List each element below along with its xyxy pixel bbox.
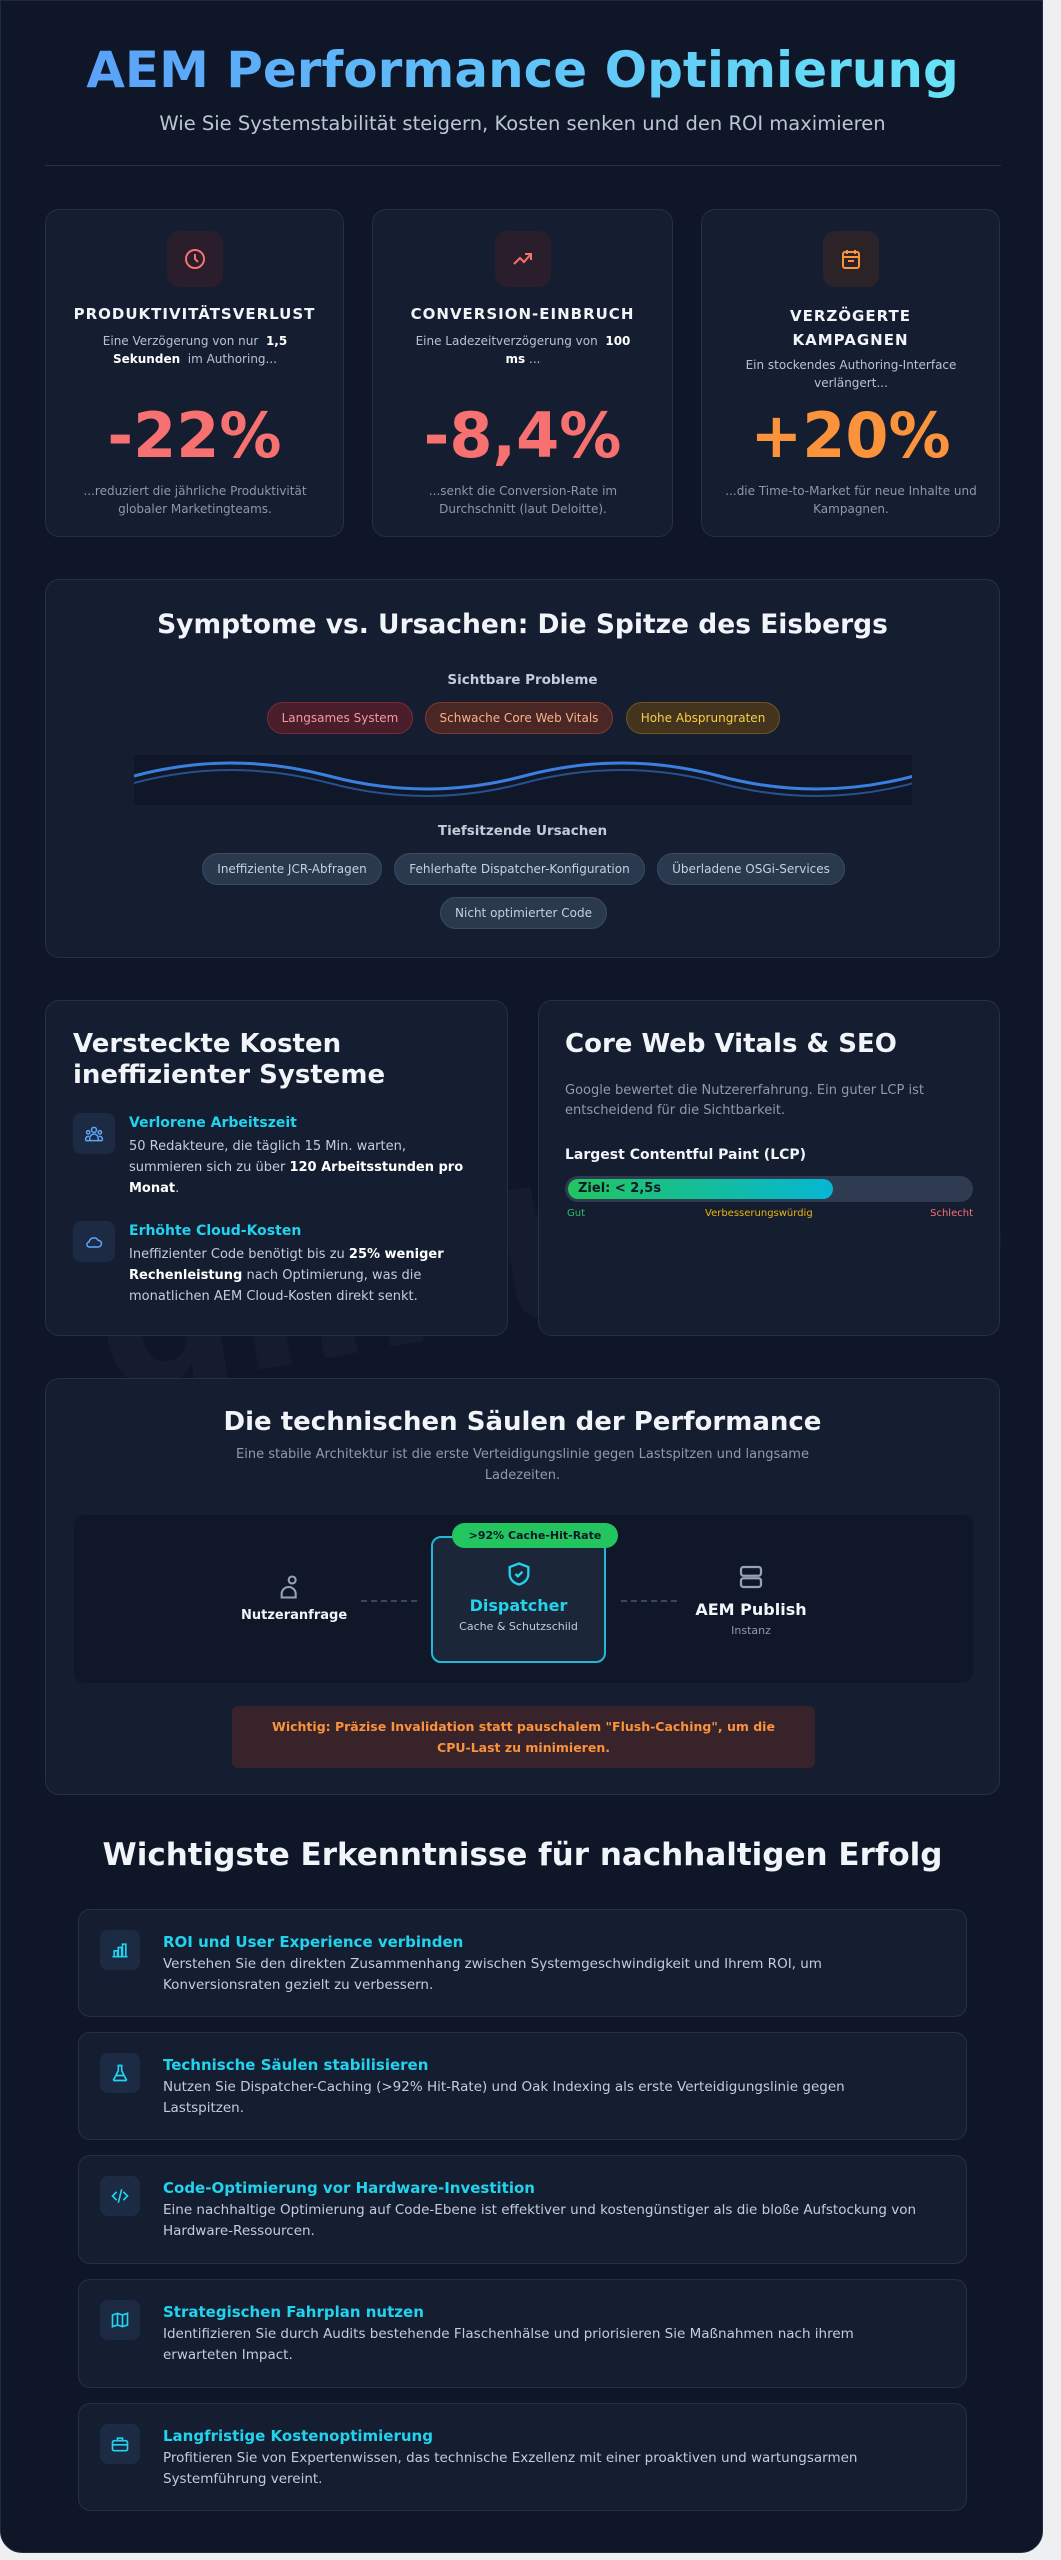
panel: Verzögerte Kampagnen: [701, 209, 1000, 537]
cause pills: Nicht optimierter Code: [455, 906, 592, 920]
panel: Produktivitätsverlust: [45, 209, 344, 537]
takeaway 2: Nutzen Sie Dispatcher-Caching (>92% Hit-Rate) und Oak Indexing als erste Verteidigungslinie gegen: [163, 2079, 845, 2095]
cause pills: [202, 853, 845, 929]
heading: Symptome vs. Ursachen: Die Spitze des Eisbergs: [157, 609, 888, 640]
symptom pills: Schwache Core Web Vitals: [440, 711, 598, 725]
arrow: dashed connector 2: [621, 1600, 677, 1602]
item: Erhöhte Cloud-Kosten: Erhöhte Cloud-Kosten: [129, 1223, 301, 1239]
symptom pills: Langsames System: [282, 711, 398, 725]
card footnote: ...reduziert die jährliche Produktivität globaler Marketingteams.: [83, 484, 307, 516]
card description: Ein stockendes Authoring-Interface verlängert...: [746, 358, 956, 390]
icon: cloud: [73, 1221, 115, 1262]
node: AEM Publish: [695, 1566, 807, 1637]
icon: code: [100, 2176, 140, 2216]
card title: [790, 306, 911, 349]
heading: [73, 1029, 385, 1090]
subtitle: Wie Sie Systemstabilität steigern, Kosten senken und den ROI maximieren: [159, 112, 886, 135]
icon: chart: [100, 1930, 140, 1970]
icon: clock: [167, 231, 223, 287]
takeaway 1: ROI und User Experience verbinden: [163, 1933, 463, 1951]
takeaway 3: Eine nachhaltige Optimierung auf Code-Ebene ist effektiver und kostengünstiger als die bloße Aufstockung von: [163, 2202, 916, 2218]
LCP bar: Ziel: < 2,5s: [578, 1181, 661, 1196]
card title: CONVERSION-EINBRUCH: [411, 305, 634, 323]
callout: warning: Wichtig: Präzise Invalidation statt pauschalem "Flush-Caching", um die: [272, 1719, 775, 1734]
big number: +20%: [750, 399, 951, 472]
panel: technische Säulen: [45, 1378, 1000, 1795]
heading: key takeaways: Wichtigste Erkenntnisse für nachhaltigen Erfolg: [103, 1837, 942, 1873]
callout: warning: CPU-Last zu minimieren.: [437, 1740, 610, 1755]
takeaway 1: [78, 1909, 967, 2017]
heading: Core Web Vitals & SEO: [565, 1029, 897, 1059]
icon: flask: [100, 2053, 140, 2093]
callout: warning: [232, 1706, 815, 1768]
card description: Eine Verzögerung von nur 1,5 Sekunden im Authoring...: [103, 334, 287, 366]
heading: Versteckte Kosten: [73, 1029, 341, 1059]
bar scale labels: Schlecht: [930, 1208, 973, 1219]
icon: calendar: [823, 231, 879, 287]
subheading: Eine stabile Architektur ist die erste Verteidigungslinie gegen Lastspitzen und langsame Ladezeiten.: [236, 1447, 809, 1483]
takeaway 3: [78, 2155, 967, 2264]
badge: cache hit rate: >92% Cache-Hit-Rate: [469, 1529, 601, 1542]
node: Nutzeranfrage: Nutzeranfrage: [241, 1608, 347, 1623]
node: AEM Publish: AEM Publish: [695, 1600, 807, 1619]
heading: Die technischen Säulen der Performance: [224, 1407, 821, 1437]
arrow: dashed connector 1: [361, 1600, 417, 1602]
takeaway 4: Strategischen Fahrplan nutzen: [163, 2303, 424, 2321]
item: Verlorene Arbeitszeit: [73, 1113, 463, 1196]
takeaway 3: Hardware-Ressourcen.: [163, 2223, 315, 2239]
item: Erhöhte Cloud-Kosten: Ineffizienter Code benötigt bis zu 25% weniger Rechenleistung nach Optimierung, was die monatlichen AEM Cloud-Kosten direkt senkt.: [129, 1247, 444, 1304]
takeaway 2: Technische Säulen stabilisieren: [163, 2056, 428, 2074]
label: deep causes: Tiefsitzende Ursachen: [438, 823, 607, 839]
takeaway 5: Langfristige Kostenoptimierung: [163, 2427, 433, 2445]
node: AEM Publish: Instanz: [731, 1624, 771, 1637]
node: Dispatcher: Cache & Schutzschild: [459, 1620, 578, 1633]
card title: PRODUKTIVITÄTSVERLUST: [74, 305, 315, 323]
card title: VERZÖGERTE: [790, 307, 911, 325]
card footnote: ...die Time-to-Market für neue Inhalte und Kampagnen.: [725, 484, 977, 516]
symptom pills: Hohe Absprungraten: [641, 711, 765, 725]
icon: briefcase: [100, 2424, 140, 2464]
bar scale labels: Verbesserungswürdig: [705, 1208, 813, 1219]
takeaway 1: Verstehen Sie den direkten Zusammenhang zwischen Systemgeschwindigkeit und Ihrem ROI, um: [163, 1956, 822, 1972]
icon: people: [73, 1113, 115, 1154]
big number: -8,4%: [424, 399, 621, 472]
big number: -22%: [107, 399, 282, 472]
panel: Core Web Vitals & SEO: [538, 1000, 1000, 1336]
title: AEM Performance Optimierung: [86, 41, 959, 99]
label: visible problems: Sichtbare Probleme: [447, 672, 598, 688]
card title: KAMPAGNEN: [792, 331, 909, 349]
badge: cache hit rate: [452, 1523, 618, 1548]
card footnote: ...senkt die Conversion-Rate im Durchschnitt (laut Deloitte).: [429, 484, 617, 516]
takeaway 1: Konversionsraten gezielt zu verbessern.: [163, 1977, 433, 1993]
takeaway 5: Systemführung vereint.: [163, 2471, 322, 2487]
bar scale labels: [567, 1208, 973, 1219]
takeaway 4: [78, 2279, 967, 2388]
panel: Symptome vs. Ursachen: [45, 579, 1000, 958]
cause pills: Ineffiziente JCR-Abfragen: [217, 862, 367, 876]
node: Dispatcher: [431, 1536, 606, 1663]
cause pills: Überladene OSGi-Services: [672, 862, 830, 876]
architecture diagram: [74, 1515, 973, 1683]
node: Nutzeranfrage: [241, 1576, 347, 1623]
card description: Eine Ladezeitverzögerung von 100 ms ...: [416, 334, 630, 366]
cause pills: Fehlerhafte Dispatcher-Konfiguration: [409, 862, 630, 876]
watermark: gmit.org: [79, 1063, 1026, 1440]
description: Google bewertet die Nutzererfahrung. Ein guter LCP ist entscheidend für die Sichtbarkeit.: [565, 1083, 924, 1118]
takeaway 5: Profitieren Sie von Expertenwissen, das technische Exzellenz mit einer proaktiven und wartungsarmen: [163, 2450, 857, 2466]
heading: ineffizienter Systeme: [73, 1060, 385, 1090]
takeaway 5: [78, 2403, 967, 2511]
takeaway 3: Code-Optimierung vor Hardware-Investition: [163, 2179, 535, 2197]
node: Dispatcher: Dispatcher: [470, 1596, 567, 1615]
item: Erhöhte Cloud-Kosten: [73, 1221, 444, 1304]
takeaway 2: [78, 2032, 967, 2140]
LCP bar: [565, 1176, 973, 1202]
panel: Conversion-Einbruch: [372, 209, 673, 537]
takeaway 2: Lastspitzen.: [163, 2100, 244, 2116]
icon: trend: [495, 231, 551, 287]
item: Verlorene Arbeitszeit: 50 Redakteure, die täglich 15 Min. warten, summieren sich zu über 120 Arbeitsstunden pro Monat.: [129, 1139, 463, 1196]
takeaway 4: Identifizieren Sie durch Audits bestehende Flaschenhälse und priorisieren Sie Maßnahmen nach ihrem: [163, 2326, 854, 2342]
wave waterline: [134, 755, 912, 805]
bar scale labels: Gut: [567, 1208, 585, 1219]
item: Verlorene Arbeitszeit: Verlorene Arbeitszeit: [129, 1115, 297, 1131]
icon: map: [100, 2300, 140, 2340]
panel: Versteckte Kosten: [45, 1000, 508, 1336]
takeaway 4: erwarteten Impact.: [163, 2347, 293, 2363]
LCP label: Largest Contentful Paint (LCP): [565, 1147, 806, 1163]
symptom pills: [267, 702, 780, 734]
